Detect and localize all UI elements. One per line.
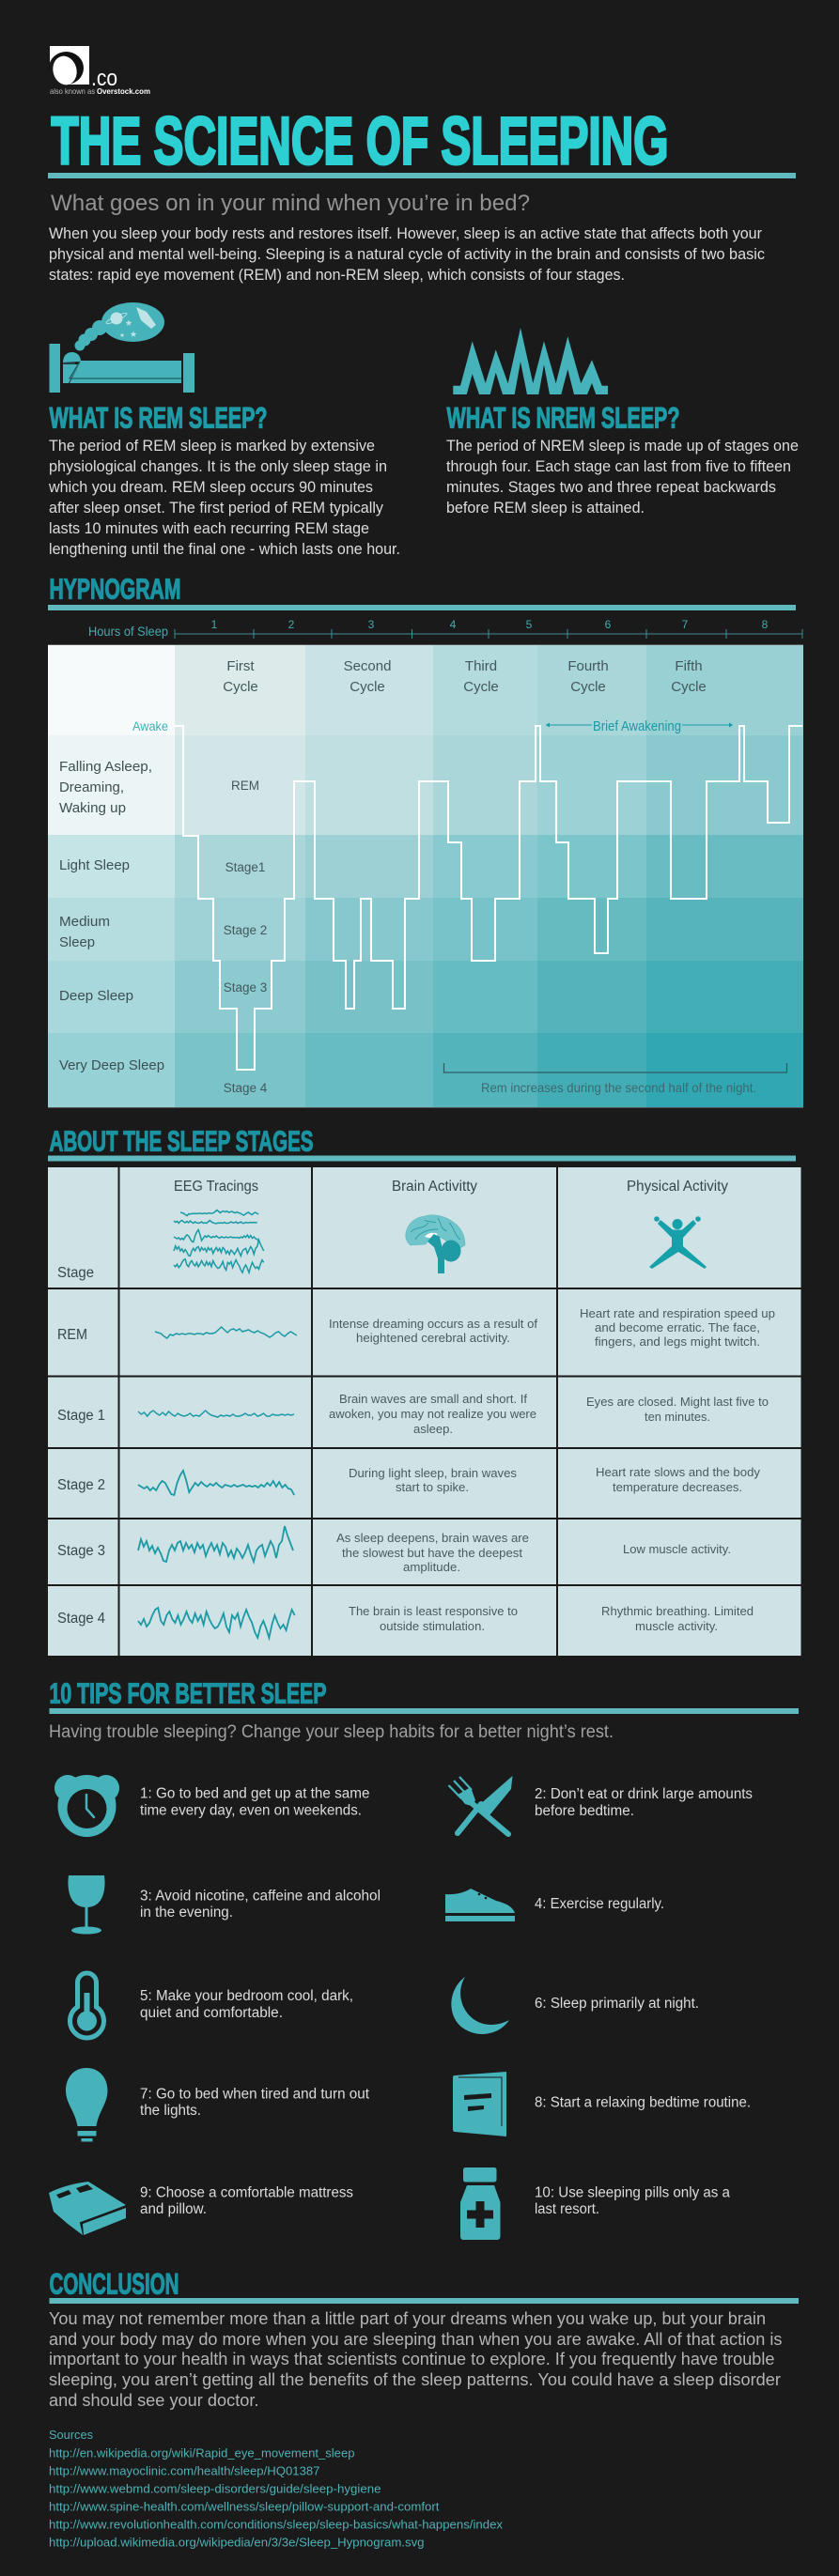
tip 3 text: 3: Avoid nicotine, caffeine and alcohol xyxy=(140,1888,381,1905)
icon: pill bottle xyxy=(460,2167,500,2240)
heading: what is NREM sleep: WHAT IS NREM SLEEP? xyxy=(447,400,680,434)
conclusion text xyxy=(49,2309,782,2410)
icon: brain xyxy=(406,1215,465,1273)
subtitle: What goes on in your mind when you’re in bed? xyxy=(51,191,530,216)
sources list: http://www.spine-health.com/wellness/sleep/pillow-support-and-comfort xyxy=(49,2500,440,2513)
REM increases bracket: Rem increases during the second half of the night. xyxy=(481,1080,756,1095)
tip 5 text: 5: Make your bedroom cool, dark, xyxy=(140,1988,353,2004)
cycle labels: Fifth xyxy=(675,658,703,674)
icon: sneaker xyxy=(445,1889,515,1921)
tip 9 text xyxy=(140,2184,353,2217)
sources list: http://www.webmd.com/sleep-disorders/guide/sleep-hygiene xyxy=(49,2481,381,2496)
tip 10 text: 10: Use sleeping pills only as a xyxy=(535,2184,730,2201)
sources list: Sources xyxy=(49,2428,93,2442)
conclusion text: and your body may do more when you are sleeping than when you are awake. All of that action is xyxy=(49,2330,782,2349)
left row labels: Dreaming, xyxy=(59,779,124,795)
conclusion text: You may not remember more than a little part of your dreams when you wake up, but your brain xyxy=(49,2309,766,2328)
hours of sleep axis: 1 xyxy=(211,618,218,631)
text: NREM description: The period of NREM sleep is made up of stages one xyxy=(446,438,799,455)
brain activity descriptions: amplitude. xyxy=(403,1560,460,1574)
physical activity descriptions: fingers, and legs might twitch. xyxy=(595,1334,760,1349)
intro text: physical and mental well-being. Sleeping is a natural cycle of activity in the brain and consists of two basic xyxy=(49,246,765,263)
cycle labels: Cycle xyxy=(350,679,385,695)
text: NREM description xyxy=(446,438,799,517)
intro text xyxy=(49,225,765,284)
cycle labels: Cycle xyxy=(463,679,499,695)
intro text: When you sleep your body rests and restores itself. However, sleep is an active state that affects both your xyxy=(49,225,762,242)
text: NREM description: minutes. Stages two and three repeat backwards xyxy=(446,479,776,496)
tip 1 text: 1: Go to bed and get up at the same xyxy=(140,1786,370,1801)
intro text: states: rapid eye movement (REM) and non-REM sleep, which consists of four stages. xyxy=(49,267,625,284)
table header labels: EEG Tracings xyxy=(174,1179,258,1195)
conclusion text: and should see your doctor. xyxy=(49,2391,259,2410)
brain activity descriptions: asleep. xyxy=(413,1422,453,1436)
tip 3 text xyxy=(140,1888,381,1920)
sources list: http://upload.wikimedia.org/wikipedia/en/3/3e/Sleep_Hypnogram.svg xyxy=(49,2536,424,2549)
physical activity descriptions: Eyes are closed. Might last five to xyxy=(586,1395,769,1409)
physical activity descriptions xyxy=(580,1306,775,1633)
tip 2 text: before bedtime. xyxy=(535,1803,634,1819)
hours of sleep axis: 2 xyxy=(288,618,295,631)
physical activity descriptions: ten minutes. xyxy=(645,1410,710,1424)
physical activity descriptions: Rhythmic breathing. Limited xyxy=(601,1604,754,1618)
conclusion text: important to your health in ways that scientists continue to explore. If you frequently have trouble xyxy=(49,2350,775,2368)
logo: O.co also known as Overstock.com: also known as xyxy=(50,86,95,96)
brain activity descriptions: heightened cerebral activity. xyxy=(356,1331,510,1345)
hours of sleep axis: 8 xyxy=(762,618,769,631)
row labels: Stage 2 xyxy=(57,1477,105,1493)
hours of sleep axis xyxy=(88,618,802,639)
stage labels on chart: Stage 2 xyxy=(224,923,267,937)
left row labels: Light Sleep xyxy=(59,857,130,873)
hours of sleep axis: 5 xyxy=(526,618,533,631)
icon: thermometer xyxy=(70,1973,104,2038)
left row labels: Falling Asleep, xyxy=(59,759,152,775)
left row labels xyxy=(59,759,164,1073)
heading: 10 tips: 10 TIPS FOR BETTER SLEEP xyxy=(49,1677,327,1709)
stage labels on chart: Stage 4 xyxy=(224,1081,268,1095)
awake label: Awake xyxy=(132,718,168,733)
brief awakening arrow: Brief Awakening xyxy=(593,719,681,734)
row labels: Stage 3 xyxy=(57,1543,105,1559)
brain activity descriptions: start to spike. xyxy=(396,1480,469,1494)
logo: O.co also known as Overstock.com: .co xyxy=(91,66,117,91)
EEG tracings per stage xyxy=(138,1327,297,1638)
hours of sleep axis: 6 xyxy=(605,618,612,631)
physical activity descriptions: and become erratic. The face, xyxy=(595,1320,760,1334)
icon: alarm clock xyxy=(54,1775,119,1837)
physical activity descriptions: Heart rate slows and the body xyxy=(596,1465,760,1479)
tip 6 text: 6: Sleep primarily at night. xyxy=(535,1996,699,2012)
icon: crescent moon xyxy=(451,1977,509,2034)
cycle labels: First xyxy=(226,658,255,674)
icon: sleeper in bed with dream cloud xyxy=(49,302,194,393)
tip 9 text: and pillow. xyxy=(140,2201,207,2217)
brain activity descriptions: As sleep deepens, brain waves are xyxy=(336,1531,529,1545)
logo: O.co also known as Overstock.com xyxy=(49,46,150,96)
text: NREM description: before REM sleep is attained. xyxy=(446,500,645,517)
brain activity descriptions: awoken, you may not realize you were xyxy=(329,1407,536,1421)
cycle labels: Second xyxy=(344,658,391,674)
cycle labels: Fourth xyxy=(567,658,609,674)
hours of sleep axis: Hours of Sleep xyxy=(88,625,168,639)
sources list: http://www.revolutionhealth.com/conditions/sleep/sleep-basics/what-happens/index xyxy=(49,2517,504,2532)
brain activity descriptions xyxy=(329,1317,537,1633)
cycle labels: Cycle xyxy=(570,679,606,695)
left row labels: Sleep xyxy=(59,934,95,950)
tip 10 text: last resort. xyxy=(535,2201,599,2217)
physical activity descriptions: muscle activity. xyxy=(635,1619,718,1633)
brain activity descriptions: During light sleep, brain waves xyxy=(349,1466,517,1480)
icon: fork and knife xyxy=(449,1776,513,1834)
tip 10 text xyxy=(535,2184,730,2217)
row labels xyxy=(57,1327,105,1627)
tip 7 text: 7: Go to bed when tired and turn out xyxy=(140,2087,370,2102)
sources list: http://www.mayoclinic.com/health/sleep/HQ01387 xyxy=(49,2464,319,2477)
physical activity descriptions: Heart rate and respiration speed up xyxy=(580,1306,775,1320)
tip 2 text xyxy=(535,1786,753,1819)
text: REM description: which you dream. REM sleep occurs 90 minutes xyxy=(48,479,373,496)
left row labels: Deep Sleep xyxy=(59,988,133,1004)
tip 4 text: 4: Exercise regularly. xyxy=(535,1896,664,1912)
stage labels on chart xyxy=(224,779,268,1095)
left row labels: Waking up xyxy=(59,800,126,816)
icon: light bulb xyxy=(66,2068,107,2141)
heading: hypnogram: HYPNOGRAM xyxy=(49,573,180,605)
sources list: http://en.wikipedia.org/wiki/Rapid_eye_movement_sleep xyxy=(49,2445,355,2460)
brief awakening arrow xyxy=(546,719,733,734)
icon: wine glass xyxy=(68,1875,105,1935)
brain activity descriptions: the slowest but have the deepest xyxy=(342,1546,522,1560)
icon: EEG tracings group xyxy=(174,1210,264,1273)
sources list xyxy=(49,2428,504,2549)
left row labels: Very Deep Sleep xyxy=(59,1057,164,1073)
tip 8 text: 8: Start a relaxing bedtime routine. xyxy=(535,2094,751,2111)
table header labels: Physical Activity xyxy=(627,1179,728,1195)
tip 2 text: 2: Don’t eat or drink large amounts xyxy=(535,1786,753,1802)
cycle labels: Cycle xyxy=(671,679,707,695)
physical activity descriptions: Low muscle activity. xyxy=(623,1542,731,1556)
tip 7 text xyxy=(140,2087,370,2119)
sleep stage step line xyxy=(174,726,802,1070)
brain activity descriptions: outside stimulation. xyxy=(380,1619,485,1633)
text: REM description: The period of REM sleep is marked by extensive xyxy=(49,438,375,455)
icon: book xyxy=(453,2072,506,2136)
tip 1 text: time every day, even on weekends. xyxy=(140,1803,362,1818)
hours of sleep axis: 7 xyxy=(682,618,689,631)
sleep stages table xyxy=(48,1167,800,1656)
table header labels: Stage xyxy=(57,1265,94,1281)
text: REM description: after sleep onset. The first period of REM typically xyxy=(49,500,384,517)
text: REM description xyxy=(48,438,400,558)
row labels: Stage 1 xyxy=(57,1408,105,1424)
icon: bed with pillows xyxy=(49,2182,126,2235)
cycle labels xyxy=(223,658,707,695)
text: REM description: lengthening until the final one - which lasts one hour. xyxy=(49,541,400,558)
tip 1 text xyxy=(140,1786,370,1818)
hypnogram chart xyxy=(48,644,803,1108)
chart background grid xyxy=(48,644,803,1108)
brain activity descriptions: Intense dreaming occurs as a result of xyxy=(329,1317,537,1331)
stage labels on chart: Stage 3 xyxy=(224,980,267,995)
heading: conclusion: CONCLUSION xyxy=(49,2267,179,2301)
cycle labels: Cycle xyxy=(223,679,258,695)
tip 9 text: 9: Choose a comfortable mattress xyxy=(140,2184,353,2201)
logo: O.co also known as Overstock.com: Overstock.com xyxy=(97,86,150,96)
brain activity descriptions: The brain is least responsive to xyxy=(349,1604,518,1618)
row labels: REM xyxy=(57,1327,87,1343)
text: REM description: physiological changes. It is the only sleep stage in xyxy=(49,458,387,475)
tip 5 text: quiet and comfortable. xyxy=(140,2005,283,2021)
row labels: Stage 4 xyxy=(57,1611,105,1627)
text: REM description: lasts 10 minutes with each recurring REM stage xyxy=(49,520,369,537)
tip 7 text: the lights. xyxy=(140,2103,201,2119)
icon: physical activity figure xyxy=(649,1216,707,1269)
conclusion text: sleeping, you aren’t getting all the benefits of the sleep patterns. You could have a sleep disorder xyxy=(49,2370,781,2389)
table header labels xyxy=(57,1179,728,1281)
tip 3 text: in the evening. xyxy=(140,1905,233,1920)
brain activity descriptions: Brain waves are small and short. If xyxy=(339,1392,527,1406)
table header labels: Brain Activitty xyxy=(392,1179,477,1195)
physical activity descriptions: temperature decreases. xyxy=(613,1480,742,1494)
heading: about the sleep stages: ABOUT THE SLEEP STAGES xyxy=(49,1125,314,1157)
REM increases bracket xyxy=(443,1063,787,1095)
text: NREM description: through four. Each stage can last from five to fifteen xyxy=(446,458,791,475)
heading: what is REM sleep: WHAT IS REM SLEEP? xyxy=(49,400,267,434)
hours of sleep axis: 4 xyxy=(450,618,457,631)
left row labels: Medium xyxy=(59,914,110,930)
stage labels on chart: REM xyxy=(231,779,259,793)
tips subheading: Having trouble sleeping? Change your sleep habits for a better night’s rest. xyxy=(49,1722,614,1742)
cycle labels: Third xyxy=(465,658,497,674)
hours of sleep axis: 3 xyxy=(368,618,375,631)
tip 5 text xyxy=(140,1988,353,2021)
stage labels on chart: Stage1 xyxy=(225,860,265,874)
icon: NREM sleep waves xyxy=(453,328,608,394)
